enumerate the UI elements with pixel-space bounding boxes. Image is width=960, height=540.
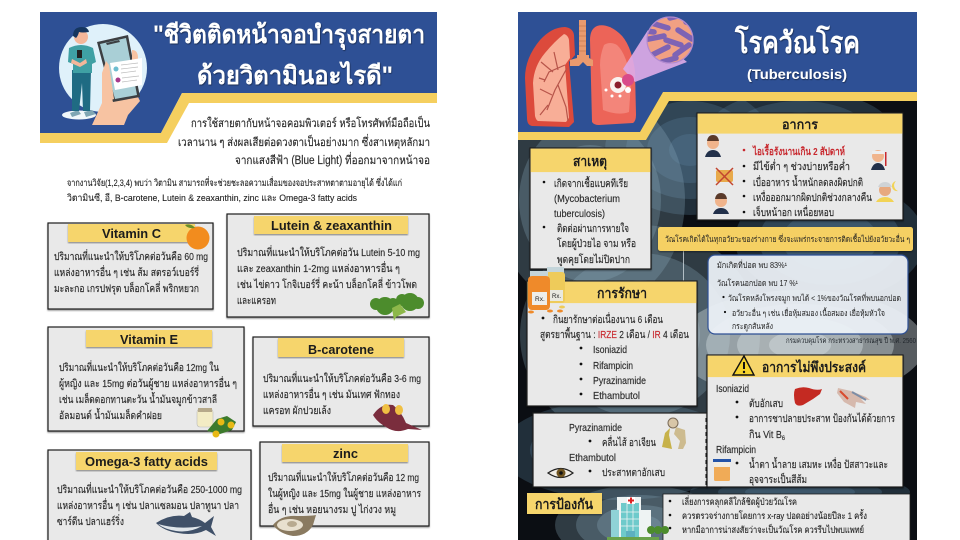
heading: treatment: การรักษา bbox=[597, 285, 647, 301]
card: Vitamin E: ปริมาณที่แนะนำให้บริโภคต่อวันคือ 12mg ใน bbox=[59, 360, 219, 374]
icon: person with smartphone bbox=[59, 24, 147, 125]
panel: causes bbox=[530, 148, 651, 269]
panel: treatment bbox=[527, 267, 697, 406]
icon: urine sample bbox=[713, 459, 731, 481]
card: Lutein and zeaxanthin: Lutein & zeaxanthin bbox=[271, 219, 392, 233]
panel: treatment: สูตรยาพื้นฐาน : IRZE 2 เดือน / IR 4 เดือน bbox=[540, 327, 689, 341]
panel: causes: โดยผู้ป่วยไอ จาม หรือ bbox=[557, 237, 636, 250]
panel: side effects left: Ethambutol bbox=[569, 452, 616, 464]
card: Omega-3 fatty acids: Omega-3 fatty acids bbox=[85, 455, 208, 469]
callout: TB can occur in all organs bbox=[658, 227, 913, 251]
panel: symptoms: มีไข้ต่ำ ๆ ช่วงบ่ายหรือค่ำ bbox=[753, 159, 850, 173]
info box: lung and extrapulmonary TB statistics: อวัยวะอื่น ๆ เช่น เยื่อหุ้มสมอง เนื้อสมอง เยื่อหุ้มหัวใจ bbox=[732, 307, 885, 318]
panel: symptoms bbox=[697, 113, 903, 220]
illustration: lungs with bacteria bbox=[525, 14, 694, 127]
intro text block: เวลานาน ๆ ส่งผลเสียต่อดวงตาเป็นอย่างมาก ซึ่งสาเหตุหลักมา bbox=[178, 134, 430, 149]
panel: adverse effects: อาการชาปลายประสาท ป้องกันได้ด้วยการ bbox=[749, 412, 895, 425]
panel: prevention list: เลี่ยงการคลุกคลีใกล้ชิดผู้ป่วยวัณโรค bbox=[682, 495, 797, 508]
card: zinc: zinc bbox=[333, 447, 358, 461]
card: Vitamin C: มะละกอ เกรปฟรุต บล็อกโคลี่ พริกหยวก bbox=[54, 281, 199, 295]
panel: treatment: Pyrazinamide bbox=[593, 375, 646, 387]
panel: adverse effects: กิน Vit B bbox=[749, 429, 787, 441]
card: B-carotene: แหล่งอาหารอื่น ๆ เช่น มันเทศ ฟักทอง bbox=[263, 387, 400, 401]
icon: no food bbox=[716, 168, 733, 185]
info box: lung and extrapulmonary TB statistics: วัณโรคนอกปอด พบ 17 %¹ bbox=[717, 278, 798, 288]
title: โรควัณโรค bbox=[734, 24, 860, 60]
icon: numb hand bbox=[837, 388, 870, 408]
info box: lung and extrapulmonary TB statistics bbox=[708, 255, 908, 334]
title bbox=[734, 24, 860, 82]
heading: adverse effects: อาการไม่พึงประสงค์ bbox=[762, 358, 866, 375]
card: Vitamin C: แหล่งอาหารอื่น ๆ เช่น ส้ม สตรอว์เบอร์รี่ bbox=[54, 265, 199, 279]
card: zinc: ปริมาณที่แนะนำให้บริโภคต่อวันคือ 12 mg bbox=[268, 470, 419, 484]
panel: causes: เกิดจากเชื้อแบคทีเรีย bbox=[554, 176, 628, 190]
icon: fever man bbox=[871, 150, 886, 170]
panel: side effects left: Pyrazinamide bbox=[569, 422, 622, 434]
card: Lutein and zeaxanthin bbox=[227, 214, 429, 321]
panel: symptoms: เจ็บหน้าอก เหนื่อยหอบ bbox=[753, 205, 834, 219]
header banner bbox=[518, 12, 917, 140]
research summary text: วิตามินซี, อี, B-carotene, Lutein & zeaxanthin, zinc และ Omega-3 fatty acids bbox=[66, 192, 357, 204]
panel: vitamins for eyes infographic bbox=[40, 12, 437, 540]
card: B-carotene bbox=[253, 337, 429, 431]
card: zinc bbox=[260, 442, 429, 536]
card: Lutein and zeaxanthin: และแครอท bbox=[237, 295, 276, 307]
intro text block bbox=[178, 115, 430, 167]
icon: orange bbox=[185, 224, 210, 250]
panel: adverse effects: อุจจาระเป็นสีส้ม bbox=[749, 472, 807, 486]
heading: symptoms: อาการ bbox=[782, 117, 819, 132]
panel: adverse effects: 6 bbox=[782, 435, 785, 442]
research summary text: จากงานวิจัย(1,2,3,4) พบว่า วิตามิน สามารถที่จะช่วยชะลอความเสื่อมของจอประสาทตาตามอายุได้ ซึ่งได้แก่ bbox=[67, 176, 402, 189]
label: prevention bbox=[527, 493, 602, 514]
panel: adverse effects: Rifampicin bbox=[716, 444, 756, 456]
icon: warning triangle bbox=[733, 356, 754, 375]
icon: night sweats bbox=[876, 181, 898, 202]
panel: symptoms: ไอเรื้อรังนานเกิน 2 สัปดาห์ bbox=[752, 143, 845, 158]
panel: causes: ติดต่อผ่านการหายใจ bbox=[557, 222, 629, 235]
icon: hospital bbox=[607, 497, 669, 540]
info box: lung and extrapulmonary TB statistics: วัณโรคหลังโพรงจมูก พบได้ < 1%ของวัณโรคที่พบนอกปอด bbox=[728, 292, 901, 304]
panel: causes: พูดคุยโดยไม่ปิดปาก bbox=[557, 253, 630, 266]
icon: chest pain man bbox=[713, 193, 729, 214]
icon: medicine bottles: Rx. bbox=[535, 296, 545, 303]
icon: broccoli bbox=[370, 293, 424, 321]
panel: adverse effects: ตับอักเสบ bbox=[749, 398, 783, 410]
card: Vitamin C: ปริมาณที่แนะนำให้บริโภคต่อวันคือ 60 mg bbox=[54, 249, 208, 263]
title: ด้วยวิตามินอะไรดี" bbox=[197, 60, 393, 90]
panel: causes: (Mycobacterium bbox=[554, 193, 620, 205]
intro text block: การใช้สายตากับหน้าจอคอมพิวเตอร์ หรือโทรศัพท์มือถือเป็น bbox=[191, 115, 430, 130]
icon: oyster bbox=[273, 515, 316, 536]
card: Omega-3 fatty acids: ปริมาณที่แนะนำให้บริโภคต่อวันคือ 250-1000 mg bbox=[57, 482, 242, 496]
panel: symptoms: เบื่ออาหาร น้ำหนักลดลงผิดปกติ bbox=[753, 175, 863, 189]
panel: side effects left: ประสาทตาอักเสบ bbox=[602, 467, 665, 479]
card: Omega-3 fatty acids: ซาร์ดีน ปลาแฮร์ริ่ง bbox=[57, 514, 124, 528]
card: Omega-3 fatty acids: แหล่งอาหารอื่น ๆ เช่น ปลาแซลมอน ปลาทูนา ปลา bbox=[57, 498, 239, 512]
title: "ชีวิตติดหน้าจอบำรุงสายตา bbox=[153, 21, 425, 51]
panel: prevention list: ควรตรวจร่างกายโดยการ x-ray ปอดอย่างน้อยปีละ 1 ครั้ง bbox=[682, 509, 867, 522]
panel: adverse effects: Isoniazid bbox=[716, 383, 749, 395]
panel: side effects left: คลื่นไส้ อาเจียน bbox=[602, 435, 656, 449]
icon: medicine bottles: Rx. bbox=[552, 294, 561, 300]
panel: treatment: Rifampicin bbox=[593, 360, 633, 372]
card: Vitamin E: อัลมอนด์ น้ำมันเมล็ดคำฝอย bbox=[59, 408, 162, 422]
icon: tuna fish bbox=[156, 512, 216, 536]
icon: liver bbox=[794, 387, 822, 406]
heading: causes: สาเหตุ bbox=[573, 153, 607, 170]
panel: treatment: กินยารักษาต่อเนื่องนาน 6 เดือน bbox=[553, 312, 663, 326]
icon: sweet potato bbox=[373, 404, 422, 431]
card: zinc: อื่น ๆ เช่น หอยนางรม ปู ไก่งวง หมู bbox=[268, 502, 396, 516]
source citation: กรมควบคุมโรค กระทรวงสาธารณสุข ปี พ.ศ. 2560 bbox=[786, 336, 916, 345]
title: (Tuberculosis) bbox=[747, 66, 847, 82]
card: Vitamin C: Vitamin C bbox=[102, 227, 161, 241]
panel: symptoms: เหงื่อออกมากผิดปกติช่วงกลางคืน bbox=[753, 190, 872, 204]
info box: lung and extrapulmonary TB statistics: กระดูกสันหลัง bbox=[732, 322, 773, 332]
x-ray background bbox=[518, 92, 917, 540]
panel: prevention list: หากมีอาการน่าสงสัยว่าจะเป็นวัณโรค ควรรีบไปพบแพทย์ bbox=[682, 523, 864, 536]
card: Lutein and zeaxanthin: ปริมาณที่แนะนำให้บริโภคต่อวัน Lutein 5-10 mg bbox=[237, 245, 420, 259]
intro text block: จากแสงสีฟ้า (Blue Light) ที่ออกมาจากหน้าจอ bbox=[235, 152, 430, 167]
icon: eye bbox=[548, 468, 573, 478]
card: Vitamin C bbox=[48, 223, 213, 309]
title bbox=[153, 21, 425, 90]
callout: TB can occur in all organs: วัณโรคเกิดได้ในทุกอวัยวะของร่างกาย ซึ่งจะแพร่กระจายการติดเชื้อไปยังอวัยวะอื่น ๆ bbox=[665, 233, 910, 244]
panel: adverse effects: น้ำตา น้ำลาย เสมหะ เหงื่อ ปัสสาวะและ bbox=[749, 457, 888, 471]
card: zinc: ในผู้หญิง และ 15mg ในผู้ชาย แหล่งอาหาร bbox=[268, 487, 421, 500]
icon: vitamin E oil and flowers bbox=[197, 408, 236, 438]
header banner bbox=[40, 12, 437, 143]
icon: coughing man bbox=[705, 135, 721, 157]
panel: prevention list bbox=[663, 494, 910, 540]
panel: treatment: Isoniazid bbox=[593, 344, 627, 356]
card: Omega-3 fatty acids bbox=[48, 450, 251, 540]
card: Vitamin E: Vitamin E bbox=[120, 333, 178, 347]
panel: causes: tuberculosis) bbox=[554, 208, 605, 220]
panel: side effects left bbox=[533, 413, 707, 487]
card: B-carotene: B-carotene bbox=[308, 343, 374, 357]
panel: adverse effects bbox=[707, 355, 903, 487]
icon: medicine bottles bbox=[528, 267, 565, 314]
icon: vomiting person bbox=[662, 418, 686, 449]
card: B-carotene: แครอท ผักปวยเล้ง bbox=[263, 405, 331, 417]
card: Vitamin E: ผู้หญิง และ 15mg ต่อวันผู้ชาย แหล่งอาหารอื่น ๆ bbox=[59, 376, 237, 390]
panel: treatment: Ethambutol bbox=[593, 390, 640, 402]
card: Vitamin E: เช่น เมล็ดดอกทานตะวัน น้ำมันจมูกข้าวสาลี bbox=[59, 392, 217, 406]
info box: lung and extrapulmonary TB statistics: มักเกิดที่ปอด พบ 83%¹ bbox=[717, 259, 787, 270]
card: Lutein and zeaxanthin: และ zeaxanthin 1-2mg แหล่งอาหารอื่น ๆ bbox=[237, 261, 400, 275]
divider: dashed line bbox=[705, 418, 707, 487]
card: Vitamin E bbox=[48, 327, 244, 438]
card: Lutein and zeaxanthin: เช่น ไข่ดาว โกจิเบอร์รี่ คะน้า บล็อกโคลี่ ข้าวโพด bbox=[237, 277, 417, 291]
card: B-carotene: ปริมาณที่แนะนำให้บริโภคต่อวันคือ 3-6 mg bbox=[263, 371, 421, 385]
panel: tuberculosis infographic bbox=[495, 12, 925, 540]
research summary text bbox=[66, 176, 402, 204]
label: prevention: การป้องกัน bbox=[535, 496, 593, 512]
